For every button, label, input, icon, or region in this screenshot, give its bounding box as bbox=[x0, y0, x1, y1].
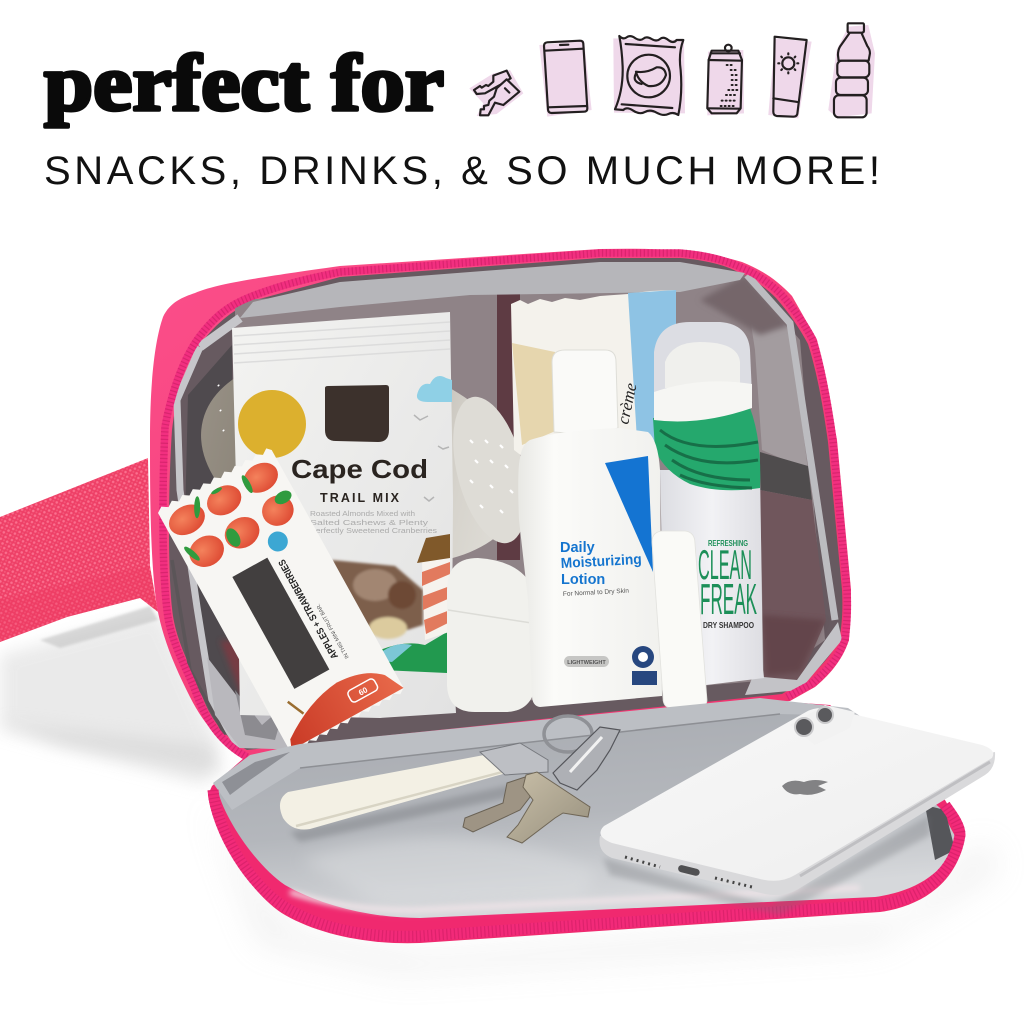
cap bbox=[552, 350, 618, 434]
phone shadow on flap bbox=[603, 815, 930, 915]
camera bump bbox=[790, 705, 855, 745]
bar label: APPLES + STRAWBERRIES bbox=[277, 557, 341, 661]
icon: soda can bbox=[707, 45, 744, 115]
lighthouse bbox=[422, 558, 450, 640]
lining left dark panel bbox=[185, 345, 300, 740]
bag crimp bbox=[234, 322, 450, 363]
product name: TRAIL MIX bbox=[320, 491, 400, 505]
apple bbox=[274, 656, 404, 750]
wipes packet bbox=[511, 290, 676, 470]
green label bbox=[653, 408, 760, 490]
strawberries bbox=[163, 457, 303, 575]
flap crinkle bbox=[222, 752, 290, 795]
lightweight pill bbox=[564, 656, 609, 667]
flap top lip bbox=[213, 698, 860, 810]
hair brush behind items bbox=[179, 323, 545, 597]
top zipper bbox=[163, 253, 847, 757]
fob clasp bbox=[480, 743, 548, 775]
lotion name: Lotion bbox=[561, 572, 605, 588]
fruit bar: 60 bbox=[357, 685, 370, 697]
phone side highlight bbox=[800, 762, 990, 876]
silver left trim bbox=[177, 347, 240, 748]
ports bbox=[625, 857, 752, 887]
brand name: Cape Cod bbox=[291, 454, 428, 484]
collar bbox=[654, 381, 752, 422]
smartphone bbox=[600, 705, 995, 915]
lip balm bbox=[652, 531, 707, 708]
fob strap bbox=[280, 752, 510, 830]
description: Perfectly Sweetened Cranberries bbox=[310, 526, 437, 535]
flap shell bbox=[208, 700, 965, 943]
packet blue band bbox=[628, 290, 676, 455]
blue badge bbox=[264, 528, 291, 555]
fruit bar bbox=[156, 446, 406, 754]
dark window bbox=[325, 385, 389, 442]
silver right fold bbox=[745, 622, 842, 695]
shampoo dry: DRY SHAMPOO bbox=[703, 621, 754, 630]
wipes packet: crème bbox=[613, 381, 641, 426]
fob shadow bbox=[290, 785, 520, 842]
icon: phone bbox=[539, 41, 592, 117]
clip bbox=[553, 727, 620, 790]
floor shadows bbox=[0, 606, 1000, 975]
can body bbox=[660, 470, 764, 690]
silver top lip bbox=[240, 262, 745, 318]
apple logo bbox=[782, 780, 828, 795]
phone edge bbox=[600, 752, 995, 895]
birds bbox=[414, 415, 449, 501]
lightweight pill: LIGHTWEIGHT bbox=[567, 660, 606, 666]
pump bbox=[665, 342, 740, 388]
pink outer body bbox=[150, 249, 851, 762]
crinkled silver bottom left bbox=[207, 657, 305, 750]
key one bbox=[463, 777, 530, 832]
icon: keys bbox=[469, 70, 523, 116]
lining mauve back wall bbox=[235, 275, 825, 720]
bar sublabel: IN THIS MINI FRUIT BAR. bbox=[315, 602, 351, 659]
icon row bbox=[469, 23, 875, 118]
clear dome bbox=[654, 322, 752, 395]
phone back bbox=[600, 708, 993, 881]
flap soft highlights bbox=[300, 837, 600, 905]
title: perfect for: perfect for bbox=[44, 40, 444, 128]
silver right trim bbox=[747, 275, 835, 620]
lining maroon behind wipes bbox=[497, 288, 520, 560]
shampoo refreshing: REFRESHING bbox=[708, 539, 748, 548]
nuts window bbox=[332, 560, 423, 639]
lower zipper bbox=[213, 790, 960, 936]
dry shampoo can bbox=[653, 322, 764, 690]
flap silver surface bbox=[217, 705, 956, 918]
lotion name: Daily bbox=[560, 540, 595, 556]
blue triangle bbox=[605, 456, 653, 572]
bag strap bbox=[0, 458, 158, 642]
lining interior bbox=[169, 258, 842, 750]
description: Roasted Almonds Mixed with bbox=[310, 509, 415, 518]
icon: snack bag bbox=[613, 36, 685, 115]
text: FREAK bbox=[700, 575, 757, 624]
ring bbox=[544, 716, 592, 752]
key two bbox=[507, 772, 590, 843]
cloud bbox=[417, 376, 452, 402]
eczema seal bbox=[632, 646, 657, 685]
lotion name bbox=[560, 540, 642, 588]
strawberry leaves bbox=[163, 455, 301, 571]
key fob and keys bbox=[280, 716, 620, 843]
flap light edge bbox=[290, 888, 860, 910]
packet tan section bbox=[512, 343, 558, 445]
lotion bottle bbox=[518, 350, 662, 707]
cameras bbox=[817, 707, 833, 723]
body bbox=[518, 428, 662, 707]
text: CLEAN bbox=[698, 541, 752, 588]
right pocket dark bbox=[925, 805, 955, 860]
description: Salted Cashews & Plenty bbox=[310, 518, 428, 527]
icon: water bottle bbox=[828, 23, 875, 117]
lining right dark band bbox=[760, 452, 812, 500]
lining left maroon bbox=[220, 640, 300, 720]
bag upper shell bbox=[150, 249, 851, 762]
icon: sunscreen tube bbox=[768, 37, 812, 118]
description bbox=[310, 509, 437, 535]
bag lower flap bbox=[208, 698, 965, 943]
subtitle: SNACKS, DRINKS, & SO MUCH MORE! bbox=[44, 149, 880, 193]
yellow sun bbox=[238, 390, 306, 458]
earbud case bbox=[447, 558, 538, 712]
trail mix bag bbox=[232, 312, 456, 718]
lotion name: Moisturizing bbox=[560, 552, 642, 572]
bar window bbox=[232, 558, 329, 689]
stitch line left bbox=[172, 560, 225, 735]
green hills bbox=[380, 632, 447, 673]
lining right upper bbox=[745, 285, 808, 470]
lotion sub text: For Normal to Dry Skin bbox=[563, 588, 629, 598]
lining right lower maroon bbox=[760, 490, 826, 680]
